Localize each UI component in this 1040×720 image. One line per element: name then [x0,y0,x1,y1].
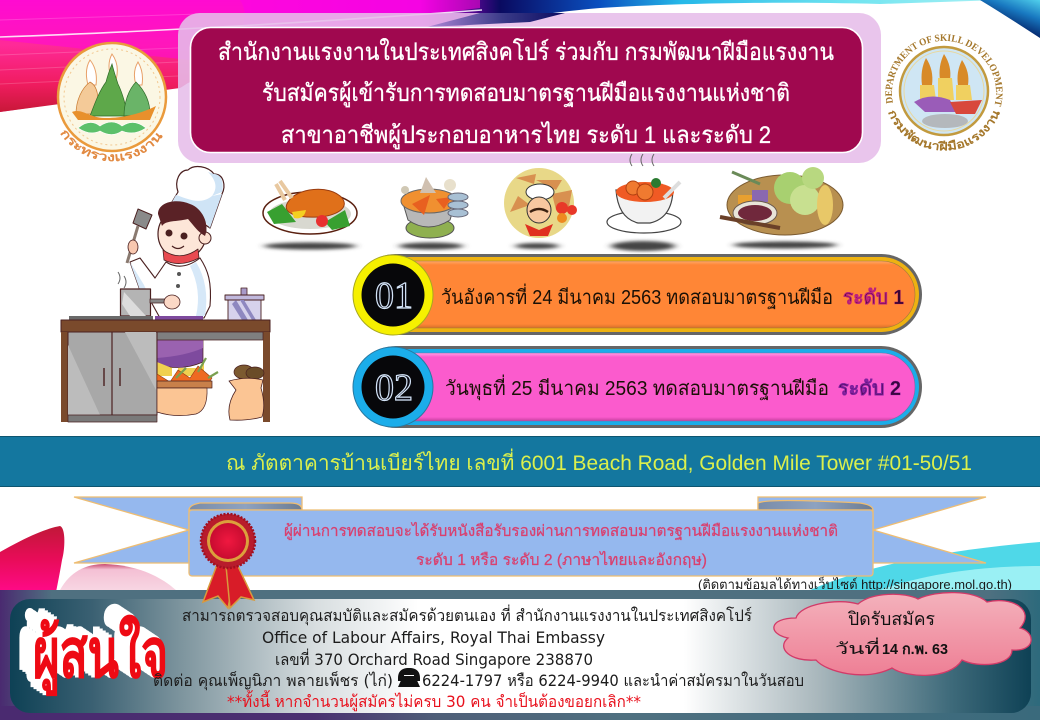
icon: ministry of labour logo [56,42,168,162]
pill: level 1 date: ระดับ 1 [843,287,904,309]
contact band [0,590,1040,720]
icon: roast chicken [263,181,357,250]
level 2 text: วันพุธที่ 25 มีนาคม 2563 ทดสอบมาตรฐานฝีมือ [445,374,829,401]
number badge 01 [353,255,433,335]
contact text [153,604,804,712]
certificate text line 1: ผู้ผ่านการทดสอบจะได้รับหนังสือรับรองผ่านการทดสอบมาตรฐานฝีมือแรงงานแห่งชาติ [284,522,838,541]
heading: interested persons: ผู้สนใจ [24,608,159,691]
heading: interested persons [18,604,168,697]
contact text: 6224-1797 หรือ 6224-9940 และนำค่าสมัครมาในวันสอบ [422,671,804,690]
venue text: ณ ภัตตาคารบ้านเบียร์ไทย เลขที่ 6001 Beach Road, Golden Mile Tower #01-50/51 [226,448,972,475]
callout: application deadline cloud: 14 ก.พ. 63 [882,641,948,658]
counter [61,320,270,332]
scarf [163,249,199,264]
contact text: ติดต่อ คุณเพ็ญนิภา พลายเพ็ชร (ไก่) [153,670,393,691]
bottom left swoosh [0,526,178,592]
pill: level 2 date: ระดับ 2 [838,378,901,400]
pill: level 2 date [353,346,922,428]
illustration: chef at counter [61,167,270,422]
contact text: สามารถตรวจสอบคุณสมบัติและสมัครด้วยตนเอง ที่ สำนักงานแรงงานในประเทศสิงคโปร์ [182,604,752,626]
medal icon [201,514,255,608]
head [158,209,206,259]
website note: (ติดตามข้อมูลได้ทางเว็บไซต์ http://singapore.mol.go.th) [698,575,1012,593]
lidded pot [241,288,247,295]
icon: telephone [398,668,420,687]
icon: department of skill development logo [885,34,1003,151]
certificate ribbon [74,497,986,576]
steam [118,272,126,288]
contact text: เลขที่ 370 Orchard Road Singapore 238870 [275,648,593,669]
contact text: **ทั้งนี้ หากจำนวนผู้สมัครไม่ครบ 30 คน จำเป็นต้องขอยกเลิก** [227,690,641,712]
heading: interested persons: ผู้สนใจ [27,610,162,693]
venue band [0,436,1040,487]
heading: interested persons: ผู้สนใจ [33,614,168,697]
heading: interested persons: ผู้สนใจ [30,612,165,695]
title panel [178,13,881,163]
title line 3: สาขาอาชีพผู้ประกอบอาหารไทย ระดับ 1 และระดับ 2 [281,121,771,150]
number badge 02 [353,347,433,427]
logo caption: กรมพัฒนาฝีมือแรงงาน [888,110,1000,151]
title line 1: สำนักงานแรงงานในประเทศสิงคโปร์ ร่วมกับ กรมพัฒนาฝีมือแรงงาน [218,38,834,66]
level 1 text: วันอังคารที่ 24 มีนาคม 2563 ทดสอบมาตรฐานฝีมือ [441,283,833,309]
icon: tom yum hot pot [399,177,468,250]
number badge 01: 01 [375,275,413,317]
icon: vegetable platter [720,167,843,248]
icon: department of skill development logo: DEPARTMENT OF SKILL DEVELOPMENT [885,34,1003,107]
pill: level 1 date [353,254,922,335]
certificate text line 2: ระดับ 1 หรือ ระดับ 2 (ภาษาไทยและอังกฤษ) [416,551,707,569]
hat [172,167,224,228]
pot in pan [120,289,150,316]
icon: cook badge [504,168,577,249]
heading: interested persons: ผู้สนใจ [21,606,156,689]
apron [155,316,203,320]
icon: soup bowl [607,154,681,251]
vegetable basket [157,366,212,387]
contact text: Office of Labour Affairs, Royal Thai Embassy [262,628,605,647]
coat [130,258,211,318]
number badge 02: 02 [375,367,413,409]
title line 2: รับสมัครผู้เข้ารับการทดสอบมาตรฐานฝีมือแรงงานแห่งชาติ [262,80,790,108]
heading: interested persons: ผู้สนใจ [18,604,153,687]
callout: application deadline cloud [774,593,1031,675]
callout: application deadline cloud: วันที่ [835,637,880,658]
deadline text: ปิดรับสมัคร [848,609,935,629]
bottom right swoosh [810,542,1040,590]
logo caption: กระทรวงแรงงาน [60,130,162,162]
top swoosh [0,0,1040,112]
spatula [133,209,152,229]
sack [234,365,254,379]
